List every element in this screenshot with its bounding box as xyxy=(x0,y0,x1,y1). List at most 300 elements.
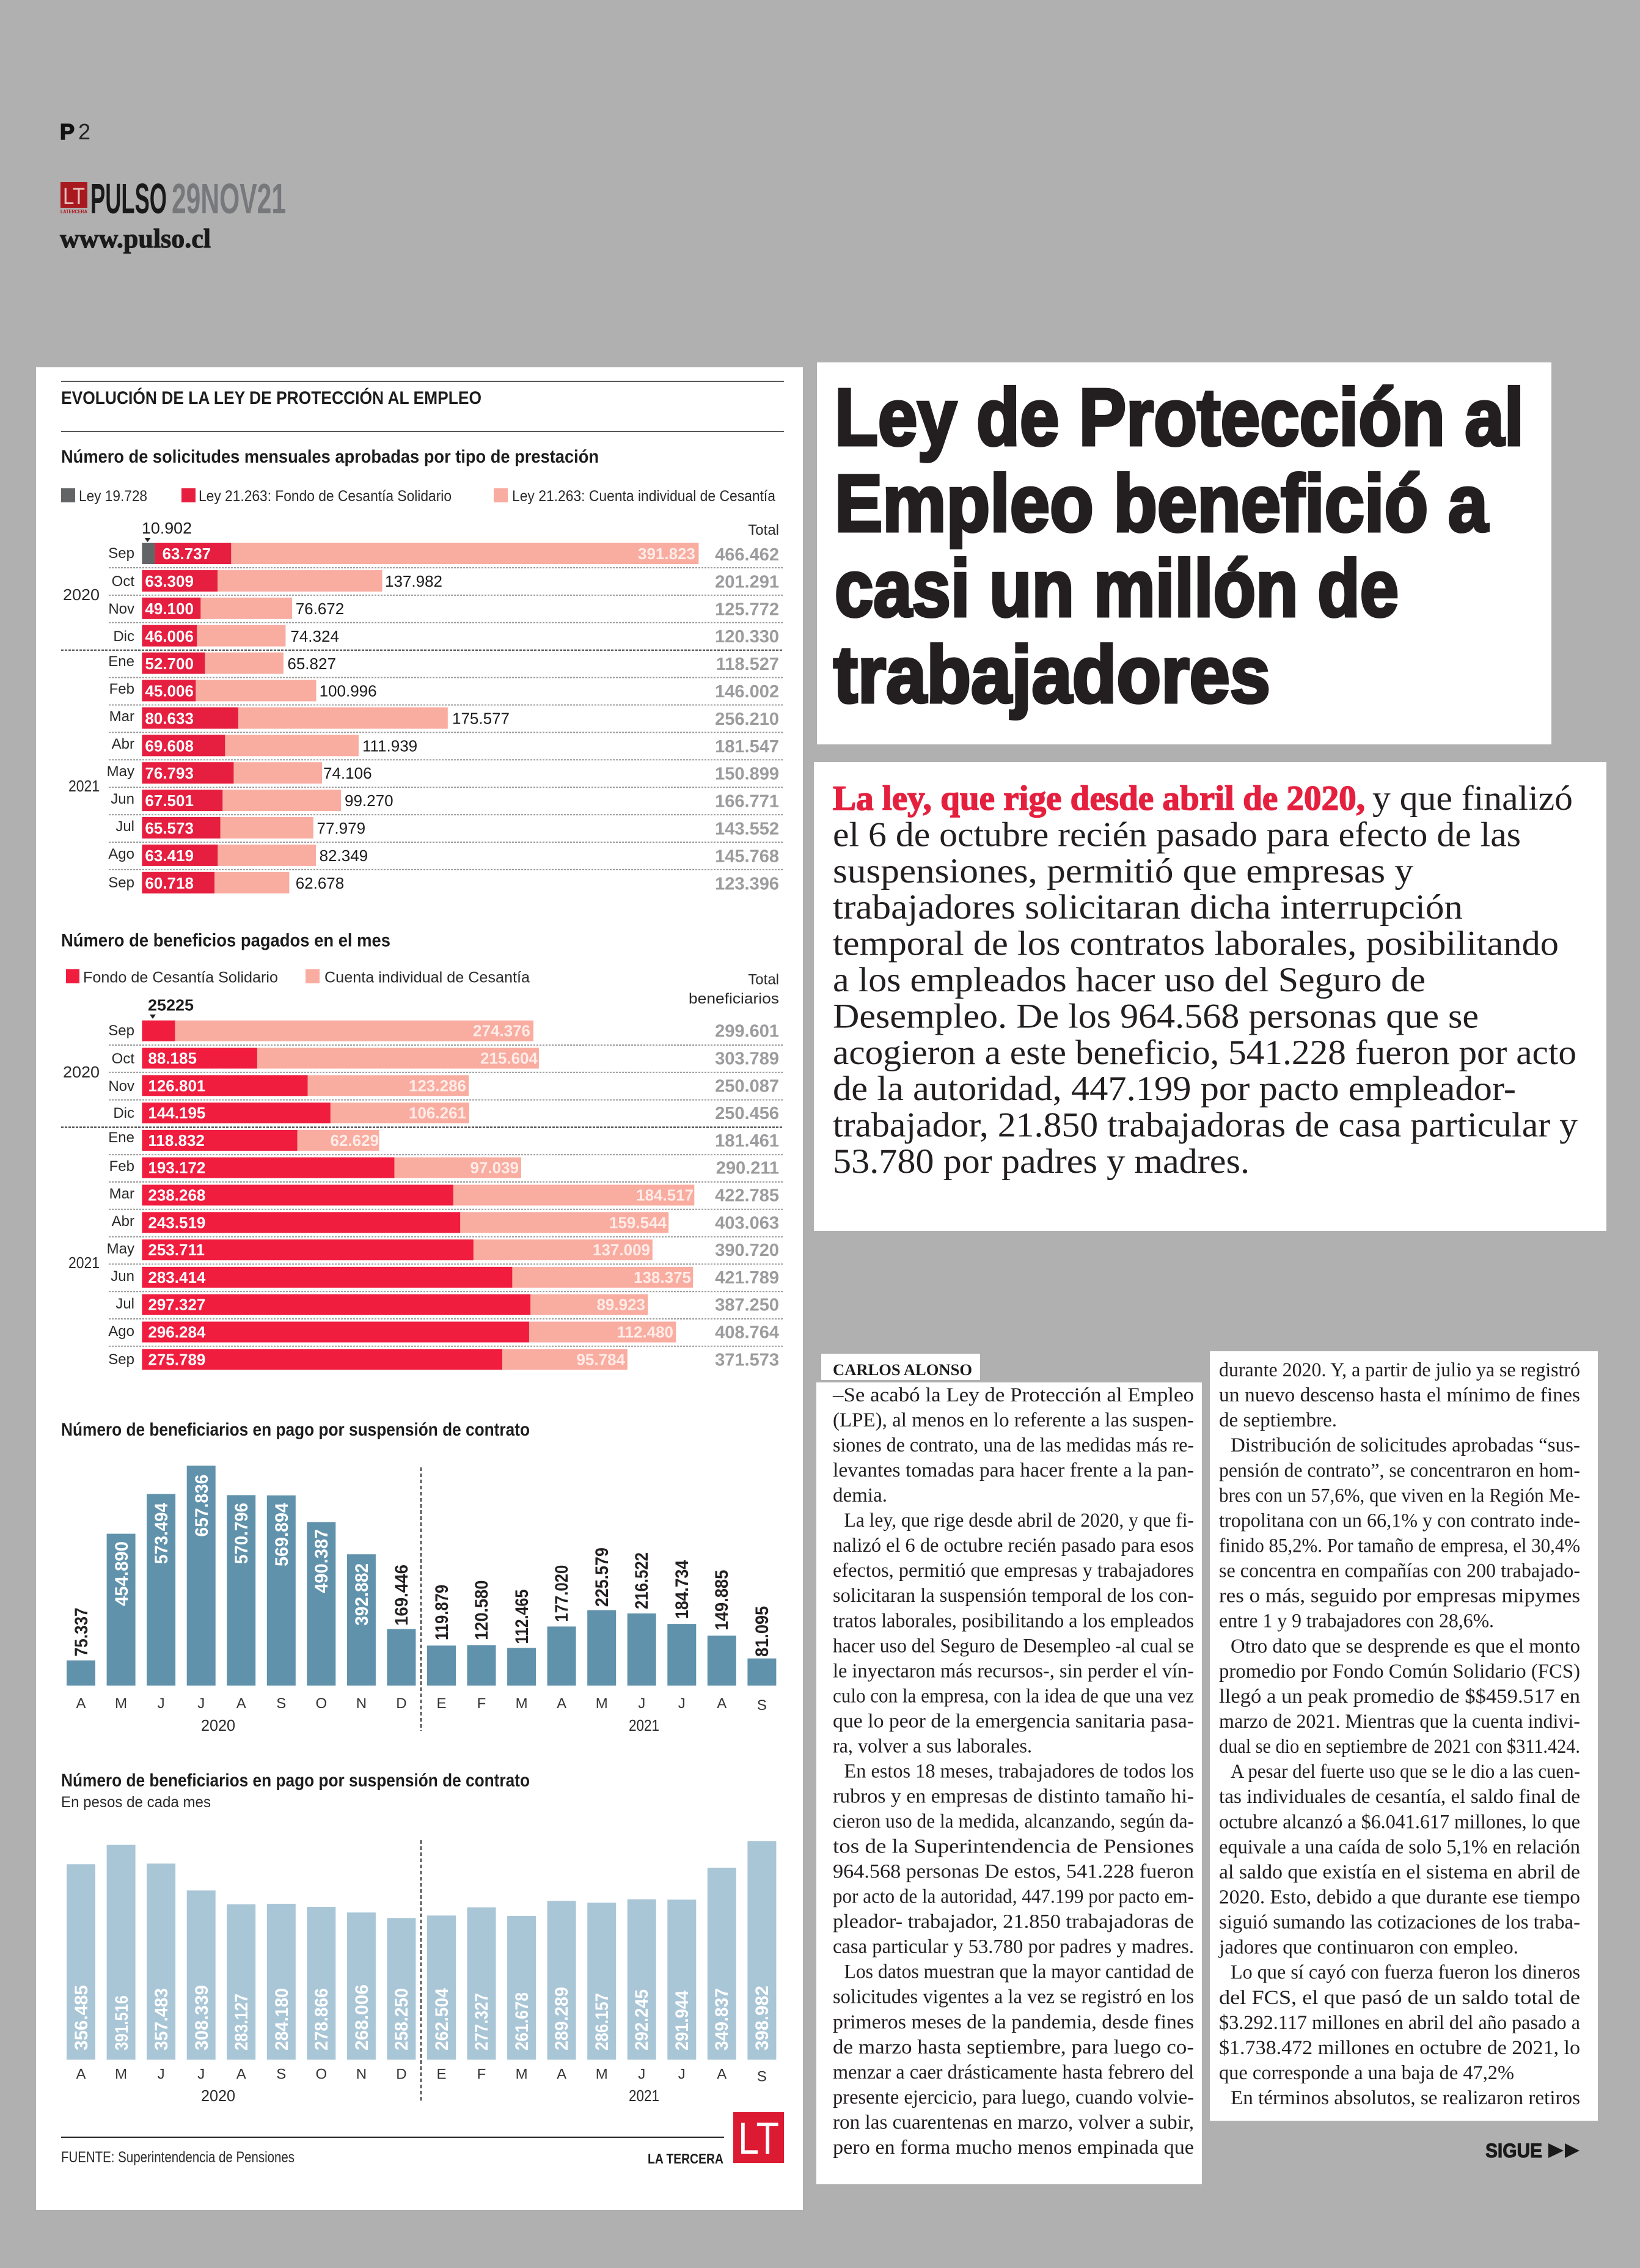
row: Abr 2021: Abr xyxy=(112,736,134,752)
row: Mar 2021 xyxy=(109,1184,779,1205)
row: Jul 2021: 297.327 xyxy=(148,1296,205,1314)
footer: source and La Tercera logo xyxy=(61,2112,784,2167)
panel: article column 2: al saldo que existía en el sistema en abril de xyxy=(1219,1861,1580,1883)
panel: article column 2: octubre alcanzó a $6.041.617 millones, lo que xyxy=(1219,1811,1580,1833)
panel: headline: Empleo benefició a xyxy=(835,458,1488,548)
legend: beneficios: Fondo de Cesantía Solidario xyxy=(83,969,278,986)
bar values: 268.006 xyxy=(352,1984,372,2050)
row: Mar 2021: 238.268 xyxy=(148,1186,205,1204)
bar values: 119.879 xyxy=(432,1585,452,1640)
masthead: Pulso logo and date: LT xyxy=(63,184,85,210)
row: Abr 2021 xyxy=(112,1212,779,1233)
bar values: 149.885 xyxy=(712,1570,732,1631)
panel: deck paragraph: suspensiones, permitió que empresas y xyxy=(833,852,1414,890)
month axis: S xyxy=(757,2068,767,2085)
row: Ago 2021: Ago xyxy=(108,1323,134,1340)
bar values: 277.327 xyxy=(472,1993,492,2050)
panel: headline: casi un millón de xyxy=(835,543,1399,633)
row: Jul 2021: 65.573 xyxy=(145,819,194,837)
panel: article column 1: ra, volver a sus laborales. xyxy=(833,1735,1032,1757)
row: Jul 2021 xyxy=(115,1294,779,1315)
row: Feb 2021 xyxy=(109,680,779,702)
stacked bar chart: solicitudes: 10.902 xyxy=(142,519,192,537)
panel: article column 1: En estos 18 meses, trabajadores de todos los xyxy=(844,1760,1194,1782)
panel: article column 2: En términos absolutos, se realizaron retiros xyxy=(1231,2087,1580,2109)
row: May 2021: May xyxy=(107,1241,134,1257)
panel: article column 2: tropolitana con un 66,1% y con contrato inde- xyxy=(1219,1510,1580,1532)
bar values: 286.157 xyxy=(592,1993,612,2050)
row: Nov 2020 xyxy=(108,1075,779,1096)
bar values: 490.387 xyxy=(312,1529,332,1593)
row: Sep 2021: 60.718 xyxy=(145,874,194,892)
row: Abr 2021: 181.547 xyxy=(715,737,779,757)
month axis: J xyxy=(678,2066,686,2083)
row: Jul 2021: 387.250 xyxy=(715,1296,779,1315)
legend: solicitudes: Ley 21.263: Fondo de Cesantía Solidario xyxy=(199,488,452,505)
row: Ene 2021: 65.827 xyxy=(287,655,336,673)
row: Feb 2021: 45.006 xyxy=(145,682,194,700)
month axis: N xyxy=(356,2066,367,2083)
panel: article column 1: demia. xyxy=(833,1484,887,1506)
panel: headline: Ley de Protección al xyxy=(835,372,1524,462)
month axis: 2020 xyxy=(201,1716,235,1734)
stacked bar chart: beneficios: 25225 xyxy=(148,996,194,1015)
month axis: J xyxy=(638,2066,645,2083)
chart heading: beneficiarios en pesos xyxy=(61,1771,530,1811)
month axis: D xyxy=(396,1695,407,1712)
row: Abr 2021: 111.939 xyxy=(362,737,417,755)
panel: article column 2: 2020. Esto, debido a que durante ese tiempo xyxy=(1219,1886,1580,1908)
row: Sep 2020: 466.462 xyxy=(715,545,779,565)
row: May 2021: 390.720 xyxy=(715,1241,779,1260)
row: Mar 2021: 256.210 xyxy=(715,710,779,729)
panel: article column 2: Otro dato que se desprende es que el monto xyxy=(1231,1635,1580,1657)
row: Ene 2021: Ene xyxy=(108,653,134,670)
stacked bar chart: beneficios: Total xyxy=(748,972,779,988)
month axis xyxy=(76,2066,767,2105)
bar values: 356.485 xyxy=(71,1985,92,2050)
bars xyxy=(67,1466,776,1686)
row: Oct 2020: Oct xyxy=(112,1051,134,1067)
bar values: 291.944 xyxy=(672,1991,692,2050)
stacked bar chart: beneficios xyxy=(61,972,783,1370)
byline: CARLOS ALONSO xyxy=(833,1361,972,1379)
month axis: J xyxy=(638,1695,645,1712)
row: Sep 2021 xyxy=(108,1349,779,1370)
row: Oct 2020: 201.291 xyxy=(715,572,779,592)
bars xyxy=(67,1841,776,2060)
row: May 2021: May xyxy=(107,763,134,780)
row: Sep 2021: 95.784 xyxy=(576,1350,626,1368)
panel: article column 2: promedio por Fondo Común Solidario (FCS) xyxy=(1219,1661,1580,1683)
row: Jun 2021: 421.789 xyxy=(715,1268,779,1288)
panel: article column 1: que lo peor de la emergencia sanitaria pasa- xyxy=(833,1710,1194,1732)
panel: article column 1: nalizó el 6 de octubre recién pasado para esos xyxy=(833,1535,1194,1557)
panel: article column 1: presente ejercicio, para luego, cuando volvie- xyxy=(833,2086,1194,2108)
row: Ago 2021: 63.419 xyxy=(145,846,194,865)
row: Oct 2020: 63.309 xyxy=(145,572,194,590)
masthead: Pulso logo and date: 29NOV21 xyxy=(172,175,286,222)
panel heading: EVOLUCIÓN DE LA LEY DE PROTECCIÓN AL EMPLEO xyxy=(61,387,481,408)
month axis: E xyxy=(436,1695,447,1712)
month axis: A xyxy=(557,1695,566,1712)
bar values: 349.837 xyxy=(712,1988,732,2050)
panel: deck paragraph: de la autoridad, 447.199 por pacto empleador- xyxy=(833,1070,1516,1108)
row: Sep 2021: Sep xyxy=(108,1351,134,1368)
row: Sep 2020 xyxy=(108,543,779,565)
row: Dic 2020: 46.006 xyxy=(145,627,194,645)
legend: solicitudes xyxy=(61,488,775,505)
row: Abr 2021: 243.519 xyxy=(148,1213,205,1231)
month axis: 2021 xyxy=(629,1716,659,1734)
stacked bar chart: solicitudes: 2020 xyxy=(63,585,100,604)
row: Ene 2021: 62.629 xyxy=(330,1131,379,1150)
panel: article column 2: pensión de contrato”, se concentraron en hom- xyxy=(1219,1459,1580,1481)
row: Jul 2021: 143.552 xyxy=(715,819,779,839)
panel: article column 2: se concentra en compañías con 200 trabajado- xyxy=(1219,1560,1580,1582)
row: Jul 2021: Jul xyxy=(115,1296,134,1312)
panel: article column 1: tratos laborales, posibilitando a los empleados xyxy=(833,1610,1194,1632)
row: Ene 2021 xyxy=(108,1129,779,1151)
row: Dic 2020: 144.195 xyxy=(148,1104,205,1122)
stacked bar chart: solicitudes xyxy=(61,519,783,894)
panel: article column 2: equivale a una caída de solo 5,1% en relación xyxy=(1219,1836,1580,1858)
row: Dic 2020 xyxy=(113,625,779,647)
month axis: O xyxy=(315,1695,327,1712)
panel: article column 1: (LPE), al menos en lo referente a las suspen- xyxy=(833,1409,1194,1431)
row: Mar 2021: 422.785 xyxy=(715,1186,779,1205)
bar values: 573.494 xyxy=(152,1503,172,1564)
bar values: 292.245 xyxy=(632,1989,652,2050)
continuation marker: SIGUE: SIGUE xyxy=(1485,2140,1542,2162)
row: Nov 2020 xyxy=(108,598,779,620)
panel: article column 1: 964.568 personas De estos, 541.228 fueron xyxy=(833,1861,1194,1883)
chart heading: beneficiarios en pesos: En pesos de cada mes xyxy=(61,1794,211,1811)
row: Ene 2021: Ene xyxy=(108,1129,134,1146)
row: Jul 2021: Jul xyxy=(115,818,134,835)
month axis: M xyxy=(596,2066,608,2083)
legend: solicitudes: Ley 21.263: Cuenta individual de Cesantía xyxy=(512,488,775,505)
bar chart: beneficiarios en pago xyxy=(67,1466,776,1734)
row: May 2021: 74.106 xyxy=(323,764,372,782)
chart heading: beneficios: Número de beneficios pagados en el mes xyxy=(61,930,390,951)
month axis: A xyxy=(236,1695,246,1712)
month axis xyxy=(76,1695,767,1734)
row: Nov 2020: 123.286 xyxy=(409,1076,466,1095)
month axis: M xyxy=(596,1695,608,1712)
panel: article column 1: cieron uso de la medida, alcanzando, según da- xyxy=(833,1810,1194,1832)
row: Ago 2021: 408.764 xyxy=(715,1323,779,1342)
panel: deck paragraph: 53.780 por padres y madres. xyxy=(833,1142,1250,1181)
panel: headline xyxy=(817,362,1551,744)
continuation marker: SIGUE xyxy=(1485,2140,1580,2162)
page number xyxy=(60,119,90,144)
row: Ene 2021: 118.832 xyxy=(148,1131,205,1150)
row: Sep 2021: 371.573 xyxy=(715,1350,779,1370)
month axis: A xyxy=(557,2066,566,2083)
row: May 2021 xyxy=(107,1239,779,1260)
panel: deck paragraph: y que finalizó xyxy=(1372,779,1573,818)
panel: article column 2: bres con un 57,6%, que viven en la Región Me- xyxy=(1219,1484,1580,1506)
panel: article column 1: culo con la empresa, con la idea de que una vez xyxy=(833,1685,1194,1707)
row: Ene 2021: 52.700 xyxy=(145,655,194,673)
row: Jun 2021: Jun xyxy=(111,1268,134,1285)
stacked bar chart: solicitudes: Total xyxy=(748,522,779,538)
row: Feb 2021: 146.002 xyxy=(715,682,779,702)
panel: deck paragraph: a los empleados hacer uso del Seguro de xyxy=(833,961,1426,999)
row: Ene 2021: 118.527 xyxy=(716,655,779,674)
bar values: 120.580 xyxy=(472,1580,492,1640)
panel: deck paragraph: el 6 de octubre recién pasado para efecto de las xyxy=(833,815,1521,854)
panel: article column 1: La ley, que rige desde abril de 2020, y que fi- xyxy=(844,1510,1194,1532)
row: Mar 2021: Mar xyxy=(109,708,134,725)
row: Jul 2021 xyxy=(115,817,779,839)
masthead: Pulso logo and date xyxy=(60,175,286,222)
row: Sep 2020: Sep xyxy=(108,1022,134,1039)
month axis: J xyxy=(158,2066,165,2083)
panel: article column 2: entre 1 y 9 trabajadores con 28,6%. xyxy=(1219,1610,1494,1632)
panel: deck paragraph: trabajador, 21.850 trabajadoras de casa particular y xyxy=(833,1106,1578,1145)
row: Nov 2020: 250.087 xyxy=(715,1076,779,1096)
bar values: 308.339 xyxy=(192,1985,212,2050)
panel: article column 2: durante 2020. Y, a partir de julio ya se registró xyxy=(1219,1359,1580,1381)
row: Nov 2020: 125.772 xyxy=(715,600,779,620)
row: Ago 2021: 112.480 xyxy=(617,1323,673,1341)
row: Nov 2020: 49.100 xyxy=(145,600,194,618)
panel: article column 1: casa particular y 53.780 por padres y madres. xyxy=(833,1936,1194,1958)
row: Dic 2020: 74.324 xyxy=(290,627,339,645)
row: Jun 2021: 67.501 xyxy=(145,791,194,810)
row: Nov 2020: Nov xyxy=(108,601,134,617)
month axis: M xyxy=(516,1695,528,1712)
panel: article column 2: tas individuales de cesantía, el saldo final de xyxy=(1219,1786,1580,1808)
row: Oct 2020 xyxy=(112,570,779,592)
bar values xyxy=(71,1984,772,2050)
stacked bar chart: beneficios: 2021 xyxy=(68,1253,100,1272)
row: Dic 2020: 250.456 xyxy=(715,1104,779,1123)
panel: article column 2: llegó a un peak promedio de $$459.517 en xyxy=(1219,1686,1580,1708)
panel: article column 2: Distribución de solicitudes aprobadas “sus- xyxy=(1231,1434,1580,1456)
row: Mar 2021 xyxy=(109,707,779,729)
panel: article column 1: por acto de la autoridad, 447.199 por pacto em- xyxy=(833,1886,1194,1908)
month axis: J xyxy=(197,2066,205,2083)
row: Jun 2021: 138.375 xyxy=(634,1268,691,1286)
panel: charts xyxy=(36,367,803,2210)
bar chart: monto en pesos xyxy=(67,1840,776,2105)
row: Ago 2021 xyxy=(108,845,779,867)
bar values: 391.516 xyxy=(112,1995,132,2050)
panel: article column 1: le inyectaron más recursos-, sin perder el vín- xyxy=(833,1660,1194,1682)
row: May 2021: 150.899 xyxy=(715,764,779,784)
row: Jul 2021: 89.923 xyxy=(596,1296,645,1314)
row: Ago 2021: 296.284 xyxy=(148,1323,206,1341)
row: Oct 2020: 88.185 xyxy=(148,1049,197,1067)
row: May 2021: 76.793 xyxy=(145,764,194,782)
bar values: 278.866 xyxy=(312,1988,332,2050)
row: Feb 2021: 97.039 xyxy=(470,1159,519,1177)
month axis: D xyxy=(396,2066,407,2083)
month axis: M xyxy=(516,2066,528,2083)
bar values: 258.250 xyxy=(392,1988,412,2050)
panel: article column 2: marzo de 2021. Mientras que la cuenta indivi- xyxy=(1219,1711,1580,1733)
panel: deck paragraph: trabajadores solicitaran dicha interrupción xyxy=(833,888,1463,927)
page number: P xyxy=(60,119,75,144)
month axis: F xyxy=(477,1695,486,1712)
panel: article column 1: tos de la Superintendencia de Pensiones xyxy=(833,1836,1194,1858)
stacked bar chart: solicitudes: 2021 xyxy=(68,777,100,795)
bar values: 184.734 xyxy=(672,1560,692,1619)
panel: deck paragraph: acogieron a este beneficio, 541.228 fueron por acto xyxy=(833,1033,1576,1072)
stacked bar chart: beneficios: 2020 xyxy=(63,1063,100,1081)
row: Feb 2021: 193.172 xyxy=(148,1159,205,1177)
row: Abr 2021: 159.544 xyxy=(609,1213,667,1231)
row: Mar 2021: Mar xyxy=(109,1186,134,1202)
row: Ene 2021 xyxy=(108,653,779,674)
row: Sep 2020: 274.376 xyxy=(473,1022,530,1040)
month axis: 2020 xyxy=(201,2086,235,2105)
panel: deck paragraph: La ley, que rige desde abril de 2020, xyxy=(833,779,1365,818)
panel: article column 2: A pesar del fuerte uso que se le dio a las cuen- xyxy=(1231,1761,1580,1783)
month axis: A xyxy=(717,2066,727,2083)
website: www.pulso.cl xyxy=(60,224,211,254)
row: May 2021: 253.711 xyxy=(148,1241,205,1259)
byline xyxy=(821,1354,980,1380)
row: Feb 2021: 290.211 xyxy=(716,1159,779,1178)
row: Jun 2021: 283.414 xyxy=(148,1268,206,1286)
bar values: 398.982 xyxy=(752,1986,772,2050)
row: Mar 2021: 80.633 xyxy=(145,709,194,727)
row: Ene 2021: 181.461 xyxy=(715,1131,779,1151)
month axis: J xyxy=(158,1695,165,1712)
panel: article column 1: ron las cuarentenas en marzo, volver a subir, xyxy=(833,2112,1194,2134)
bar values: 169.446 xyxy=(392,1565,412,1626)
bar values: 81.095 xyxy=(752,1606,772,1657)
panel: article column 1: solicitudes vigentes a la vez se registró en los xyxy=(833,1986,1194,2008)
panel: article column 2: que corresponde a una baja de 47,2% xyxy=(1219,2062,1514,2084)
panel: article column 2: Lo que sí cayó con fuerza fueron los dineros xyxy=(1231,1962,1580,1984)
month axis: E xyxy=(436,2066,447,2083)
panel: article column 2: jadores que continuaron con empleo. xyxy=(1218,1937,1518,1959)
month axis: F xyxy=(477,2066,486,2083)
panel: article column 2: $3.292.117 millones en abril del año pasado a xyxy=(1219,2012,1580,2034)
row: Mar 2021: 175.577 xyxy=(452,709,510,727)
panel: article column 1: efectos, permitió que empresas y trabajadores xyxy=(833,1560,1194,1582)
row: Sep 2021: 62.678 xyxy=(296,874,344,892)
bar values: 216.522 xyxy=(632,1552,652,1609)
row: Dic 2020: Dic xyxy=(113,628,134,645)
bar values: 75.337 xyxy=(71,1607,92,1656)
row: Dic 2020: 106.261 xyxy=(409,1104,466,1122)
row: Dic 2020: Dic xyxy=(113,1105,134,1121)
month axis: A xyxy=(717,1695,727,1712)
row: Sep 2020 xyxy=(108,1021,779,1041)
bar values: 261.678 xyxy=(512,1992,532,2050)
month axis: N xyxy=(356,1695,367,1712)
panel: article column 1: siones de contrato, una de las medidas más re- xyxy=(833,1434,1194,1456)
row: Sep 2021: Sep xyxy=(108,875,134,891)
panel: article column 1: –Se acabó la Ley de Protección al Empleo xyxy=(832,1384,1194,1406)
row: Oct 2020: 303.789 xyxy=(715,1049,779,1068)
row: Nov 2020: 76.672 xyxy=(296,600,344,618)
bar values: 570.796 xyxy=(232,1503,252,1564)
row: Nov 2020: Nov xyxy=(108,1078,134,1095)
row: May 2021 xyxy=(107,762,779,784)
month axis: A xyxy=(236,2066,246,2083)
row: Abr 2021: Abr xyxy=(112,1213,134,1230)
panel: article column 2: res o más, seguido por empresas mipymes xyxy=(1219,1585,1580,1607)
row: Jun 2021 xyxy=(111,1267,779,1288)
legend: solicitudes: Ley 19.728 xyxy=(79,488,147,505)
row: Dic 2020: 120.330 xyxy=(715,627,779,647)
bar values: 262.504 xyxy=(432,1988,452,2050)
bar values: 289.289 xyxy=(552,1987,572,2050)
month axis: M xyxy=(115,1695,127,1712)
row: Abr 2021 xyxy=(112,735,779,757)
panel: headline: trabajadores xyxy=(833,629,1270,719)
footer: source and La Tercera logo: FUENTE: Superintendencia de Pensiones xyxy=(61,2149,295,2166)
bar values: 283.127 xyxy=(232,1994,252,2050)
bar values: 569.894 xyxy=(272,1503,292,1566)
panel: article column 2: $1.738.472 millones en octubre de 2021, lo xyxy=(1219,2037,1580,2059)
row: Dic 2020 xyxy=(113,1103,779,1123)
footer: source and La Tercera logo: LA TERCERA xyxy=(648,2151,723,2167)
panel: deck paragraph: temporal de los contratos laborales, posibilitando xyxy=(833,925,1559,963)
footer: source and La Tercera logo: LT xyxy=(738,2114,779,2163)
row: Nov 2020: 126.801 xyxy=(148,1076,205,1095)
chart heading: beneficiarios: Número de beneficiarios en pago por suspensión de contrato xyxy=(61,1420,530,1440)
bar values: 177.020 xyxy=(552,1565,572,1622)
panel: article column 1: de marzo hasta septiembre, para luego co- xyxy=(833,2036,1194,2058)
row: Feb 2021 xyxy=(109,1158,779,1178)
row: Sep 2020: 299.601 xyxy=(715,1022,779,1041)
month axis: A xyxy=(76,2066,86,2083)
row: Oct 2020: Oct xyxy=(112,573,134,590)
month axis: S xyxy=(757,1697,767,1714)
panel: article column 1: pleador- trabajador, 21.850 trabajadoras de xyxy=(833,1911,1194,1933)
row: Sep 2020: 391.823 xyxy=(638,545,695,563)
panel: article column 1: menzar a caer drásticamente hasta febrero del xyxy=(833,2061,1194,2083)
panel: article column 2: siguió sumando las cotizaciones de los traba- xyxy=(1219,1912,1580,1934)
row: Mar 2021: 184.517 xyxy=(636,1186,694,1204)
month axis: O xyxy=(315,2066,327,2083)
row: Abr 2021: 403.063 xyxy=(715,1213,779,1233)
bar values: 225.579 xyxy=(592,1547,612,1607)
row: Sep 2020: Sep xyxy=(108,545,134,562)
panel: article column 1: hacer uso del Seguro de Desempleo -al cual se xyxy=(833,1635,1194,1657)
bar values: 284.180 xyxy=(272,1988,292,2050)
chart heading: beneficiarios en pesos: Número de beneficiarios en pago por suspensión de contrato xyxy=(61,1771,530,1791)
row: Sep 2021: 275.789 xyxy=(148,1350,205,1368)
row: Jun 2021: Jun xyxy=(111,791,134,807)
bar values: 657.836 xyxy=(192,1474,212,1536)
row: Jun 2021: 99.270 xyxy=(345,791,394,810)
masthead: Pulso logo and date: LATERCERA xyxy=(60,209,87,215)
row: Sep 2020: 63.737 xyxy=(163,545,211,563)
page number: 2 xyxy=(78,119,90,144)
row: Oct 2020: 137.982 xyxy=(385,572,442,590)
row: Oct 2020: 215.604 xyxy=(480,1049,538,1067)
row: Ago 2021: Ago xyxy=(108,846,134,862)
bar values: 112.465 xyxy=(512,1590,532,1644)
legend: beneficios xyxy=(66,969,530,986)
stacked bar chart: beneficios: beneficiarios xyxy=(689,991,779,1007)
row: Feb 2021: 100.996 xyxy=(320,682,377,700)
row: Jul 2021: 77.979 xyxy=(317,819,365,837)
month axis: S xyxy=(276,2066,286,2083)
panel: article column 1: Los datos muestran que la mayor cantidad de xyxy=(844,1961,1194,1983)
row: Ago 2021: 145.768 xyxy=(715,847,779,867)
panel: article column 1: solicitaran la suspensión temporal de los con- xyxy=(833,1585,1194,1607)
